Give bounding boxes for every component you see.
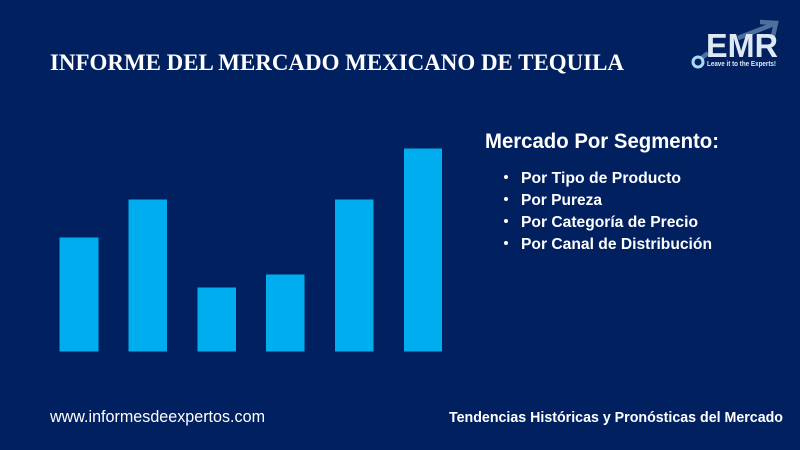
segment list: Por Canal de Distribución (521, 236, 712, 253)
title: INFORME DEL MERCADO MEXICANO DE TEQUILA (50, 50, 624, 76)
segment list: Por Pureza (521, 192, 602, 209)
segment list (504, 170, 712, 253)
footer tagline: Tendencias Históricas y Pronósticas del Mercado (449, 410, 783, 426)
segment list: Por Categoría de Precio (521, 214, 698, 231)
website link: www.informesdeexpertos.com (49, 408, 265, 426)
segment list: Por Tipo de Producto (521, 170, 681, 187)
segment heading: Mercado Por Segmento: (485, 129, 719, 153)
bar chart (60, 148, 442, 352)
icon: EMR logo: EMR (706, 27, 778, 64)
icon: EMR logo (693, 22, 778, 68)
icon: EMR logo: Leave it to the Experts! (707, 61, 776, 68)
